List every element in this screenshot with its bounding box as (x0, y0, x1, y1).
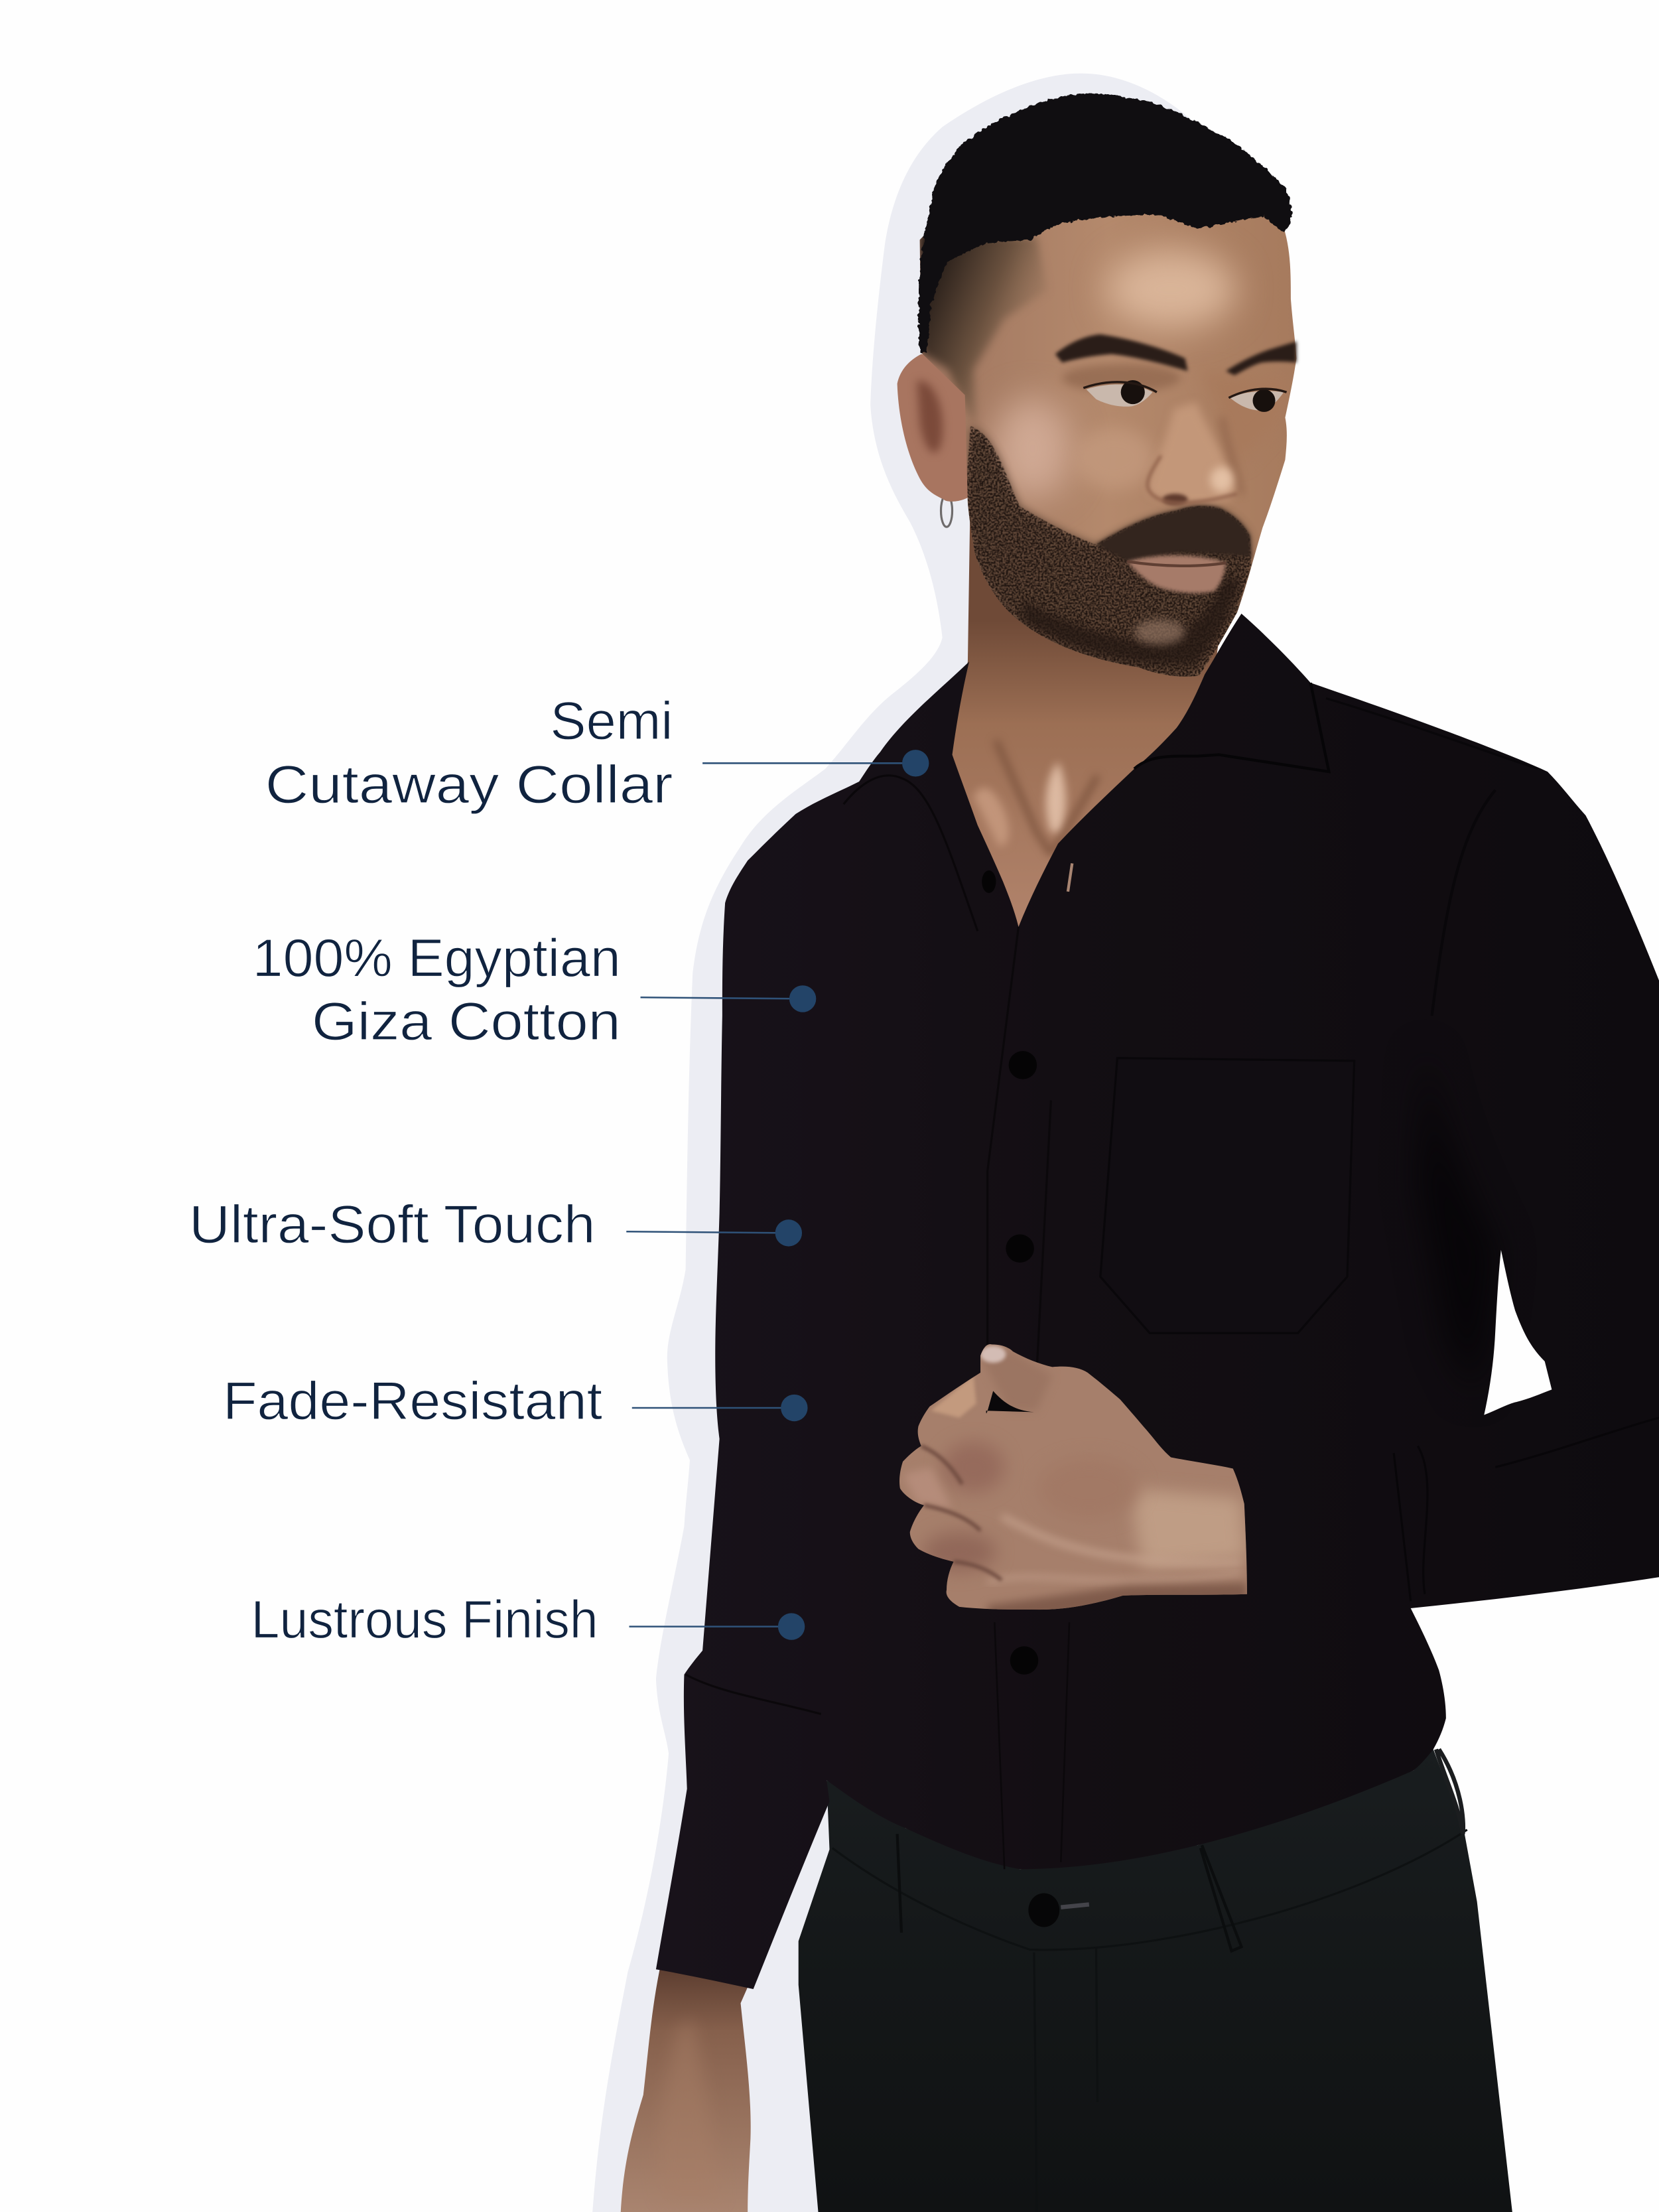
left eyebrow (1055, 334, 1188, 371)
right hand (899, 1344, 1247, 1610)
callout: soft touch: Ultra-Soft Touch (189, 1195, 595, 1255)
cheek highlight (993, 398, 1072, 500)
hanging loop (1436, 1750, 1463, 1834)
tendon highlights (1002, 1517, 1241, 1563)
halo silhouette behind model (592, 74, 1199, 2212)
placket (988, 927, 1051, 1368)
back of hand tone (1120, 1484, 1142, 1507)
callout: collar (265, 691, 929, 815)
beard stubble (965, 426, 1251, 681)
waist button (1028, 1893, 1059, 1927)
right eye (1230, 391, 1284, 411)
collarbone highlight (1046, 762, 1066, 833)
callouts (189, 691, 929, 1650)
face base (920, 141, 1296, 677)
face shading group (920, 233, 1287, 681)
callout: collar: Cutaway Collar (265, 755, 673, 815)
gap between thumb and finger (986, 1391, 1034, 1413)
waistband seam (832, 1830, 1467, 1950)
trousers (799, 1750, 1512, 2212)
callout: fade resistant (223, 1371, 808, 1431)
shirt buttons (982, 870, 996, 893)
callout: collar: Semi (550, 691, 673, 751)
callout: lustrous finish: Lustrous Finish (251, 1590, 598, 1650)
head (897, 93, 1296, 681)
callout: fade resistant: Fade-Resistant (223, 1371, 602, 1431)
button hole (1068, 863, 1072, 892)
sideburn fade (920, 233, 1047, 431)
lower hand shadow (988, 1583, 1247, 1622)
ear (897, 354, 973, 502)
right brow shade (1286, 399, 1290, 414)
callout: cotton (253, 928, 816, 1052)
callout: cotton: Giza Cotton (312, 992, 621, 1052)
nose shading (1148, 402, 1237, 505)
nostril (1162, 494, 1188, 505)
moustache (1096, 506, 1251, 561)
armpit shadow (1418, 1044, 1498, 1397)
finger creases (921, 1446, 1002, 1580)
thumb tone (980, 1351, 1053, 1411)
left cuff seam (686, 1675, 821, 1714)
beard base (965, 426, 1251, 681)
belt loops (897, 1834, 1241, 1951)
lips (1127, 555, 1226, 593)
left forearm and hand (621, 1954, 756, 2212)
fly (1034, 1947, 1098, 2212)
earring (941, 494, 953, 527)
forehead highlight (1106, 249, 1236, 328)
collar right edge (1134, 683, 1329, 772)
white gap between body and arm (1484, 1250, 1552, 1415)
yoke seam (1326, 699, 1538, 769)
jawline dark band (1023, 579, 1241, 665)
eye socket shade (1062, 364, 1181, 392)
collar left edge (844, 776, 978, 931)
shoulder seam (1432, 790, 1495, 1016)
knuckle rose shade (943, 1442, 1004, 1493)
wrist highlight (1128, 1488, 1247, 1568)
callout: cotton: 100% Egyptian (253, 928, 621, 988)
hair (918, 93, 1292, 353)
callout: soft touch (189, 1195, 802, 1255)
chin highlight (1134, 619, 1185, 645)
neck tendon shadow (996, 740, 1051, 853)
right eyebrow (1226, 342, 1296, 376)
chest pocket (1100, 1058, 1355, 1333)
left eye (1087, 384, 1153, 407)
shirt (656, 614, 1659, 1989)
callout: lustrous finish (251, 1590, 805, 1650)
neck (948, 480, 1222, 938)
finger tone (931, 1375, 976, 1418)
right cuff seams (1394, 1418, 1659, 1601)
